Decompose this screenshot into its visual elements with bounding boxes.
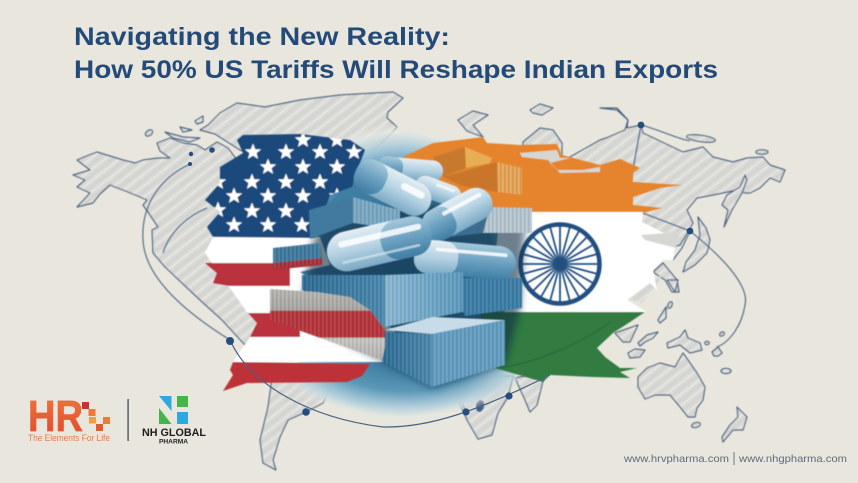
lower glow: [293, 328, 517, 428]
US flag: navy field: [205, 134, 365, 238]
pill: top behind: [376, 156, 444, 182]
route lines upper: [143, 125, 746, 412]
NH Global logo: PHARMA: [159, 438, 189, 446]
container: small left: [273, 243, 322, 270]
title: Navigating the New Reality:: [74, 23, 450, 51]
map: Madagascar: [475, 400, 485, 412]
route dots: [188, 122, 693, 416]
container: bottom large: [382, 317, 505, 387]
pill: lower right: [413, 239, 517, 281]
logo: pixel V: [82, 402, 110, 431]
pill: right tilted: [418, 182, 498, 246]
map: Arctic islands: [144, 116, 203, 142]
India flag: land gap: [520, 150, 600, 173]
title: How 50% US Tariffs Will Reshape Indian Exports: [74, 56, 718, 84]
map: Southern India: [515, 372, 545, 412]
NH Global logo: [142, 396, 206, 446]
container: right blue: [460, 278, 522, 316]
India flag: orange band: [403, 137, 682, 213]
US flag shape: [205, 132, 395, 391]
title: [74, 23, 718, 84]
container: orange lower: [443, 162, 522, 195]
container: large middle: [302, 272, 463, 327]
website footer: www.hrvpharma.com: [623, 453, 729, 465]
NH Global logo: NH GLOBAL: [142, 427, 206, 439]
pill: large top: [349, 154, 437, 222]
stacked containers and pills: [270, 147, 532, 387]
pill: behind centre: [412, 173, 464, 209]
Ashoka chakra: [520, 224, 600, 304]
India flag: green band: [480, 312, 645, 382]
map: Greenland: [200, 92, 403, 170]
India flag shape: [403, 137, 682, 382]
HRV logo: HR: [28, 392, 83, 441]
container: flag wrapped: [270, 289, 385, 360]
logo divider: [127, 399, 129, 441]
central glow: [258, 123, 542, 427]
world map: [73, 92, 785, 470]
map: Tasmania and New Zealand: [691, 407, 747, 442]
map: Kamchatka island: [722, 175, 747, 227]
map: Korea and China coast: [653, 263, 679, 292]
US flag: red stripe three: [223, 362, 370, 391]
map: North America: [73, 138, 290, 345]
pill: large centre: [323, 213, 435, 275]
US flag: stars: [210, 132, 362, 232]
container: upper left: [309, 197, 400, 239]
container: orange top: [433, 147, 492, 177]
map: South-east Asia: [615, 275, 731, 374]
map: Japan: [683, 217, 710, 272]
map: Southern Africa: [455, 376, 513, 439]
map: Europe north: [458, 104, 562, 160]
global route arc: [230, 340, 550, 427]
logo: NH mark: [159, 396, 188, 424]
container shadow: [300, 200, 525, 388]
map: Australia: [638, 353, 705, 417]
map: Asia: [560, 108, 785, 250]
India flag: white band: [495, 212, 675, 312]
map: Arctic Asia islands: [686, 133, 768, 154]
website footer: [623, 452, 847, 465]
India flag: grey brush: [641, 232, 680, 248]
container: grey blue right: [440, 207, 532, 238]
US flag: red stripe two: [248, 313, 300, 337]
map: South America: [260, 378, 335, 470]
India flag: route over green: [505, 322, 610, 367]
website footer: www.nhgpharma.com: [738, 453, 847, 465]
HRV logo: The Elements For Life: [28, 433, 110, 443]
US flag: white stripes: [205, 237, 395, 362]
US flag: red stripe one: [205, 263, 290, 286]
